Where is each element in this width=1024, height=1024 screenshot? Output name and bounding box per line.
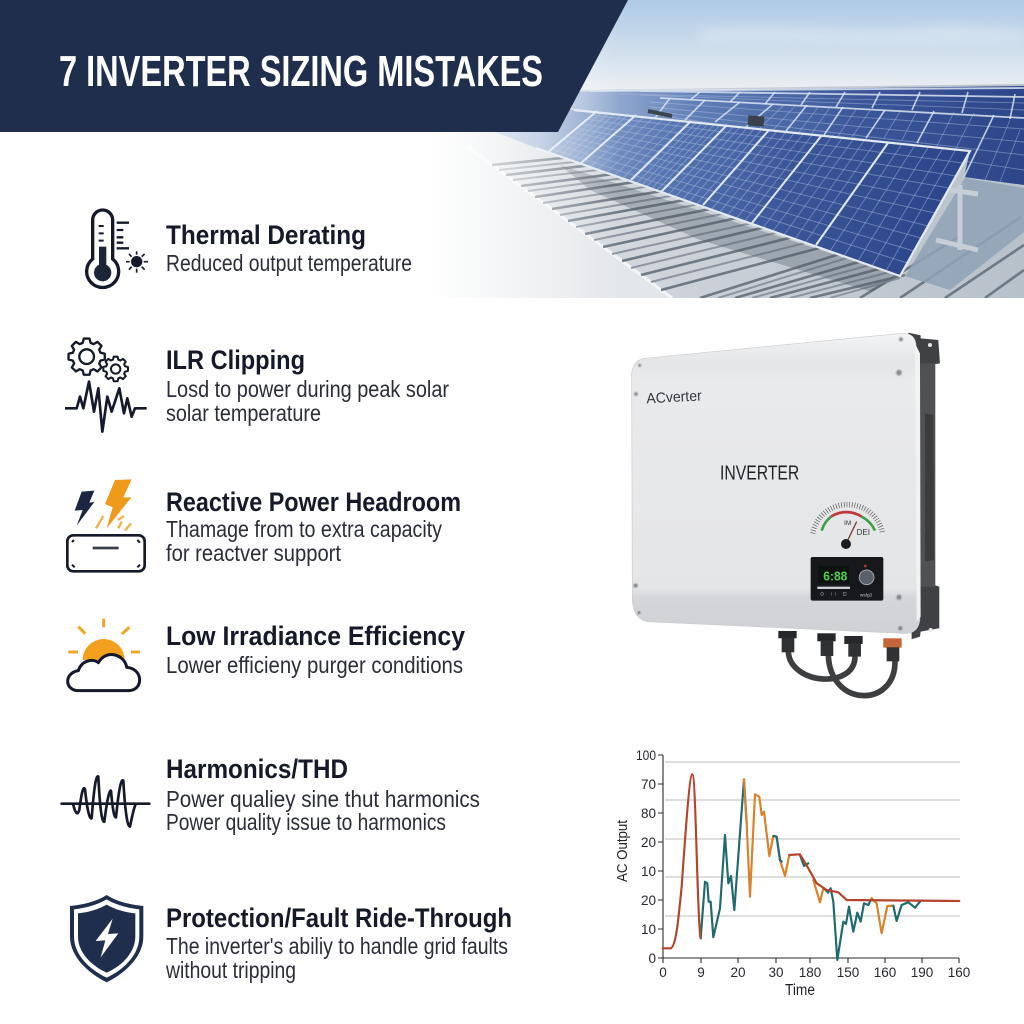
title: 7 INVERTER SIZING MISTAKES (59, 47, 543, 96)
text: thermal derating: Reduced output temperature (166, 250, 412, 276)
text: low irradiance efficiency: Lower efficieny purger conditions (166, 652, 463, 678)
x axis labels: 190 (911, 965, 933, 980)
text: protection/fault ride-through (165, 903, 512, 983)
text: thermal derating (166, 220, 412, 276)
x axis labels: 30 (768, 965, 784, 980)
text: thermal derating: Thermal Derating (166, 220, 366, 250)
data series (663, 774, 959, 960)
grid lines (665, 762, 960, 916)
icon: display panel: wsfg3 (860, 593, 873, 598)
icon: mounting bracket (908, 333, 940, 639)
text: harmonics/THD (166, 754, 480, 835)
x axis labels: 0 (659, 965, 667, 980)
y axis labels (636, 748, 656, 966)
icon: sun behind a cloud (68, 619, 140, 691)
text: ILR clipping: ILR Clipping (166, 345, 305, 375)
y axis labels: 80 (641, 806, 656, 821)
icon: gauge: IM (844, 520, 851, 527)
icon: cables (778, 631, 902, 696)
text: protection/fault ride-through: Protection/Fault Ride-Through (166, 903, 512, 933)
photo: solar panels on a metal roof (425, 0, 1024, 298)
y axis labels: 0 (648, 951, 656, 966)
text: reactive power headroom: Reactive Power Headroom (166, 487, 461, 517)
text: harmonics/THD: Power qualiey sine thut harmonics (166, 786, 480, 812)
icon: shield with lightning bolt (70, 895, 143, 982)
y axis labels: 10 (641, 922, 656, 937)
x axis labels: 9 (697, 965, 705, 980)
chart axes (658, 755, 959, 963)
line chart: AC output over time (614, 748, 970, 999)
text: reactive power headroom (166, 487, 461, 566)
icon: screws (633, 337, 903, 631)
text: ILR clipping (166, 345, 449, 426)
inverter product illustration (632, 333, 940, 696)
text: harmonics/THD: Power quality issue to harmonics (166, 809, 446, 835)
text: ILR clipping: solar temperature (166, 400, 321, 426)
icon: harmonics waveform (62, 776, 149, 827)
text: protection/fault ride-through: The inverter's abiliy to handle grid faults (166, 933, 508, 959)
x axis labels: 150 (837, 965, 859, 980)
y axis labels: 70 (641, 777, 656, 792)
x axis title: Time (785, 982, 815, 999)
icon: gears and waveform (65, 339, 147, 432)
text: ILR clipping: Losd to power during peak solar (166, 376, 449, 402)
icon: inverter case (632, 333, 920, 633)
x axis labels: 20 (730, 965, 746, 980)
x axis labels: 160 (874, 965, 896, 980)
x axis labels: 180 (799, 965, 821, 980)
y axis labels: 20 (641, 835, 656, 850)
y axis labels: 10 (641, 864, 656, 879)
y axis title: AC Output (614, 819, 631, 882)
inverter label: INVERTER (720, 462, 799, 484)
icon: gauge (813, 505, 883, 549)
title banner (0, 0, 628, 132)
y axis labels: 100 (636, 748, 656, 763)
text: reactive power headroom: Thamage from to extra capacity (166, 516, 442, 542)
text: reactive power headroom: for reactver support (166, 540, 342, 566)
text: low irradiance efficiency (166, 621, 465, 678)
brand label: ACverter (646, 388, 702, 407)
text: low irradiance efficiency: Low Irradiance Efficiency (166, 621, 465, 651)
x axis labels (659, 965, 970, 980)
icon: display panel (811, 557, 883, 601)
x axis labels: 160 (948, 965, 970, 980)
text: harmonics/THD: Harmonics/THD (166, 754, 348, 784)
icon: display panel: 6:88 (823, 570, 847, 584)
text: protection/fault ride-through: without tripping (165, 957, 296, 983)
icon: thermometer with sun (87, 210, 148, 287)
icon: gauge: DEI (857, 528, 870, 537)
icon: display panel: ⊙ !! ⊡ (820, 591, 847, 597)
y axis labels: 20 (641, 893, 656, 908)
icon: lightning bolts over a device (67, 479, 145, 571)
